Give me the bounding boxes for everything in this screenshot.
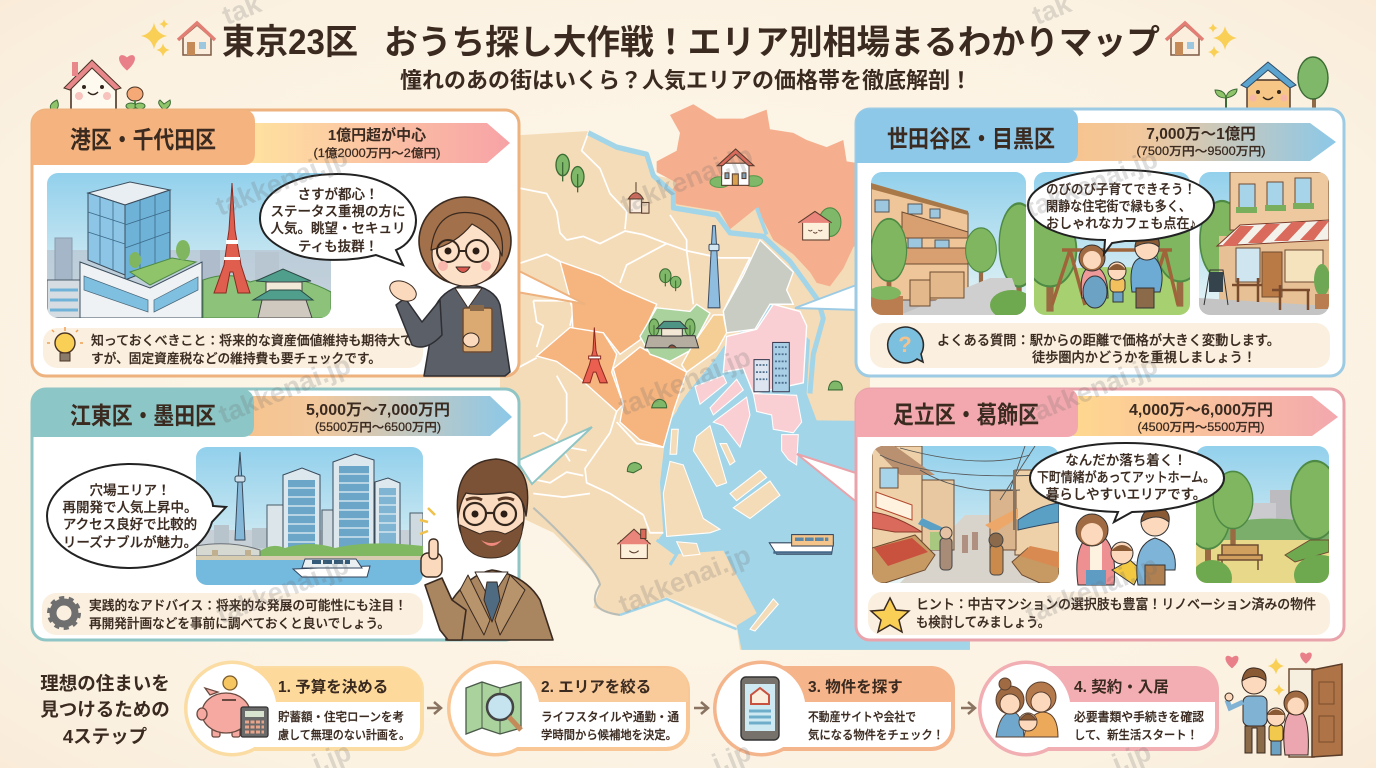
pointer: Adachi area callout: [797, 454, 859, 504]
speech bubble: Adachi: 暮らしやすいエリアです。: [1046, 487, 1206, 502]
watermarks: takkenai.jp: [211, 142, 352, 222]
panel: Setagaya / Meguro: [856, 109, 1344, 376]
step 2: area: ライフスタイルや通勤・通: [541, 709, 679, 724]
map icon: park trees: [660, 269, 681, 291]
tip: hint: も検討してみましょう。: [916, 615, 1050, 630]
speech bubble: Koto: リーズナブルが魅力。: [63, 534, 197, 550]
map icon: house south: [617, 529, 651, 559]
speech bubble: Koto: 穴場エリア！: [90, 482, 170, 498]
step 3: search: 気になる物件をチェック！: [808, 727, 944, 742]
icon: light bulb: [47, 327, 83, 361]
speech bubble: Setagaya: [1028, 170, 1214, 254]
mother: [1079, 245, 1108, 308]
illustration: shopping street: [872, 446, 1059, 583]
speech bubble: Minato: さすが都心！: [298, 186, 378, 202]
step 4: contract: して、新生活スタート！: [1074, 727, 1198, 742]
tab heading: Adachi: [856, 389, 1078, 437]
panel: Koto / Sumida: [32, 389, 519, 640]
map icon: trees north-west: [556, 154, 584, 192]
map icon: Tokyo Skytree: [708, 226, 720, 308]
illustration: neighbourhood park: [1196, 446, 1329, 583]
map of Tokyo 23 wards: [500, 104, 970, 650]
speech bubble: Setagaya: のびのび子育てできそう！: [1046, 182, 1196, 197]
tip: practical advice: 再開発計画などを事前に調べておくと良いでしょう。: [89, 616, 390, 631]
watermarks: [211, 0, 1162, 768]
steps heading: 見つけるための: [40, 699, 170, 720]
tab heading: Setagaya: [856, 109, 1078, 163]
title decoration left: sparkles and house: [141, 19, 215, 57]
speech bubble: Setagaya: 閑静な住宅街で緑も多く、: [1046, 198, 1191, 214]
tab heading: Adachi: 足立区・葛飾区: [893, 402, 1039, 429]
map icon: water bus: [769, 535, 833, 554]
step 2: area: 2. エリアを絞る: [541, 678, 651, 696]
speech bubble: Koto: 再開発で人気上昇中。: [62, 500, 198, 515]
child: [1108, 262, 1126, 302]
father: [1131, 234, 1162, 308]
icon: mother, father and baby: [996, 678, 1058, 737]
step 1: budget: 1. 予算を決める: [278, 677, 388, 696]
panel: Adachi / Katsushika: [856, 389, 1346, 640]
map icon: Tokyo Tower: [583, 327, 607, 383]
tip: practical advice: [42, 593, 423, 635]
speech bubble: Adachi: [1030, 443, 1224, 522]
icon: question bubble: [888, 327, 923, 363]
illustration: apartment: [871, 172, 1026, 315]
illustration: Koto riverside towers: [196, 447, 423, 585]
illustration: cafe: [1199, 172, 1330, 315]
speech bubble: Minato: ティも抜群！: [298, 239, 378, 254]
subtitle: 憧れのあの街はいくら？人気エリアの価格帯を徹底解剖！: [400, 68, 972, 93]
decoration: blue-roof house top right: [1215, 57, 1328, 110]
watermarks: takkenai.jp: [1021, 144, 1162, 224]
title: 東京23区: [222, 23, 358, 62]
price arrow: Setagaya: [1073, 123, 1336, 161]
panel: Minato / Chiyoda: [32, 110, 519, 376]
illustration: family in park: [1034, 172, 1190, 315]
step 1: budget: 貯蓄額・住宅ローンを考: [278, 709, 404, 724]
price arrow: Adachi: [1073, 396, 1338, 436]
watermarks: takkenai.jp: [616, 140, 757, 220]
tab heading: Minato: [32, 110, 255, 165]
map icon: manor house: [710, 149, 763, 187]
price arrow: Setagaya: 7,000万～1億円: [1146, 125, 1256, 143]
step 2: area: [449, 662, 688, 754]
tip: good to know: [43, 327, 423, 368]
map icon: smiling house: [798, 208, 841, 240]
speech bubble: Minato: 人気。眺望・セキュリ: [270, 221, 406, 236]
watermarks: takkenai.jp: [1021, 350, 1162, 430]
tip: good to know: すが、固定資産税などの維持費も要チェックです。: [91, 351, 381, 366]
step 1: budget: 慮して無理のない計画を。: [278, 727, 410, 742]
tip: practical advice: 実践的なアドバイス：将来的な発展の可能性にも注目！: [89, 598, 407, 613]
speech bubble: Adachi: 下町情緒があってアットホーム。: [1037, 469, 1215, 485]
watermarks: takkenai.jp: [614, 540, 755, 620]
map icon: bush east: [828, 381, 842, 390]
icon: question bubble: ?: [898, 332, 912, 357]
character: male advisor: [420, 459, 553, 640]
step 4: contract: 4. 契約・入居: [1074, 677, 1169, 696]
illustration: Minato skyline: [47, 173, 331, 318]
speech bubble: Setagaya: おしゃれなカフェも点在♪: [1046, 215, 1196, 231]
pointer: Minato area callout: [517, 270, 585, 304]
speech bubble: Minato: ステータス重視の方に: [270, 204, 406, 219]
title: おうち探し大作戦！エリア別相場まるわかりマップ: [384, 24, 1160, 62]
arrow 2: [694, 702, 708, 714]
price arrow: Koto: (5500万円～6500万円): [315, 421, 441, 434]
step 4: contract: [980, 662, 1217, 754]
character: female advisor: [387, 197, 511, 376]
speech bubble: Minato: [260, 174, 416, 265]
illustration: family at new home door: [1225, 653, 1342, 757]
tip: FAQ: 徒歩圏内かどうかを重視しましょう！: [1032, 350, 1256, 365]
arrow 3: [961, 702, 975, 714]
title decoration right: house and sparkles: [1166, 23, 1237, 58]
steps heading: [40, 673, 170, 747]
step 3: search: 3. 物件を探す: [808, 678, 903, 696]
step 4: contract: 必要書類や手続きを確認: [1074, 709, 1204, 724]
price arrow: Minato: 1億円超が中心: [328, 126, 426, 144]
arrow 1: [427, 702, 441, 714]
price arrow: Adachi: 4,000万～6,000万円: [1129, 402, 1273, 419]
tab heading: Setagaya: 世田谷区・目黒区: [887, 126, 1055, 153]
tab heading: Koto: [32, 389, 254, 437]
watermarks: takkenai.jp: [212, 550, 353, 630]
step 2: area: 学時間から候補地を決定。: [541, 727, 677, 742]
icon: gear: [49, 598, 79, 628]
map icon: bush: [652, 399, 667, 408]
decoration: smiling house top left: [50, 55, 170, 112]
map icon: small station: [628, 182, 649, 213]
steps heading: 理想の住まいを: [40, 673, 170, 694]
pointer: Koto area callout: [517, 427, 592, 484]
step 1: budget: [186, 662, 422, 754]
map icon: high-rise buildings: [754, 342, 789, 392]
steps heading: 4ステップ: [63, 726, 148, 747]
tip: good to know: 知っておくべきこと：将来的な資産価値維持も期待大で: [91, 333, 413, 348]
price arrow: Minato: [250, 123, 510, 163]
tab heading: Koto: 江東区・墨田区: [70, 403, 216, 430]
watermarks: takkenai.jp: [614, 342, 755, 422]
price arrow: Koto: 5,000万～7,000万円: [306, 402, 450, 419]
tab heading: Minato: 港区・千代田区: [70, 127, 216, 154]
watermarks: takkenai.jp: [214, 350, 355, 430]
speech bubble: Adachi: なんだか落ち着く！: [1065, 453, 1187, 468]
map icon: bush south: [627, 462, 642, 473]
step 3: search: [715, 662, 953, 754]
watermarks: takkenai.jp: [1021, 550, 1162, 630]
map icon: Imperial Palace: [645, 319, 699, 348]
speech bubble: Koto: [47, 464, 226, 568]
price arrow: Setagaya: (7500万円～9500万円): [1136, 145, 1266, 158]
tip: FAQ: [870, 323, 1330, 368]
tip: hint: ヒント：中古マンションの選択肢も豊富！リノベーション済みの物件: [916, 597, 1316, 612]
price arrow: Adachi: (4500万円～5500万円): [1138, 421, 1265, 434]
icon: piggy bank and calculator: [197, 676, 268, 737]
price arrow: Minato: (1億2000万円～2億円): [314, 146, 441, 160]
icon: star: [871, 598, 909, 632]
icon: smartphone with house: [741, 677, 779, 740]
speech bubble: Koto: アクセス良好で比較的: [63, 517, 197, 532]
price arrow: Koto: [249, 396, 512, 436]
step 3: search: 不動産サイトや会社で: [808, 709, 916, 724]
pointer: Setagaya area callout: [795, 284, 859, 310]
tip: hint: [868, 592, 1330, 635]
tip: FAQ: よくある質問：駅からの距離で価格が大きく変動します。: [937, 332, 1280, 348]
illustration: family: [1076, 507, 1175, 585]
icon: map and magnifier: [466, 682, 521, 734]
